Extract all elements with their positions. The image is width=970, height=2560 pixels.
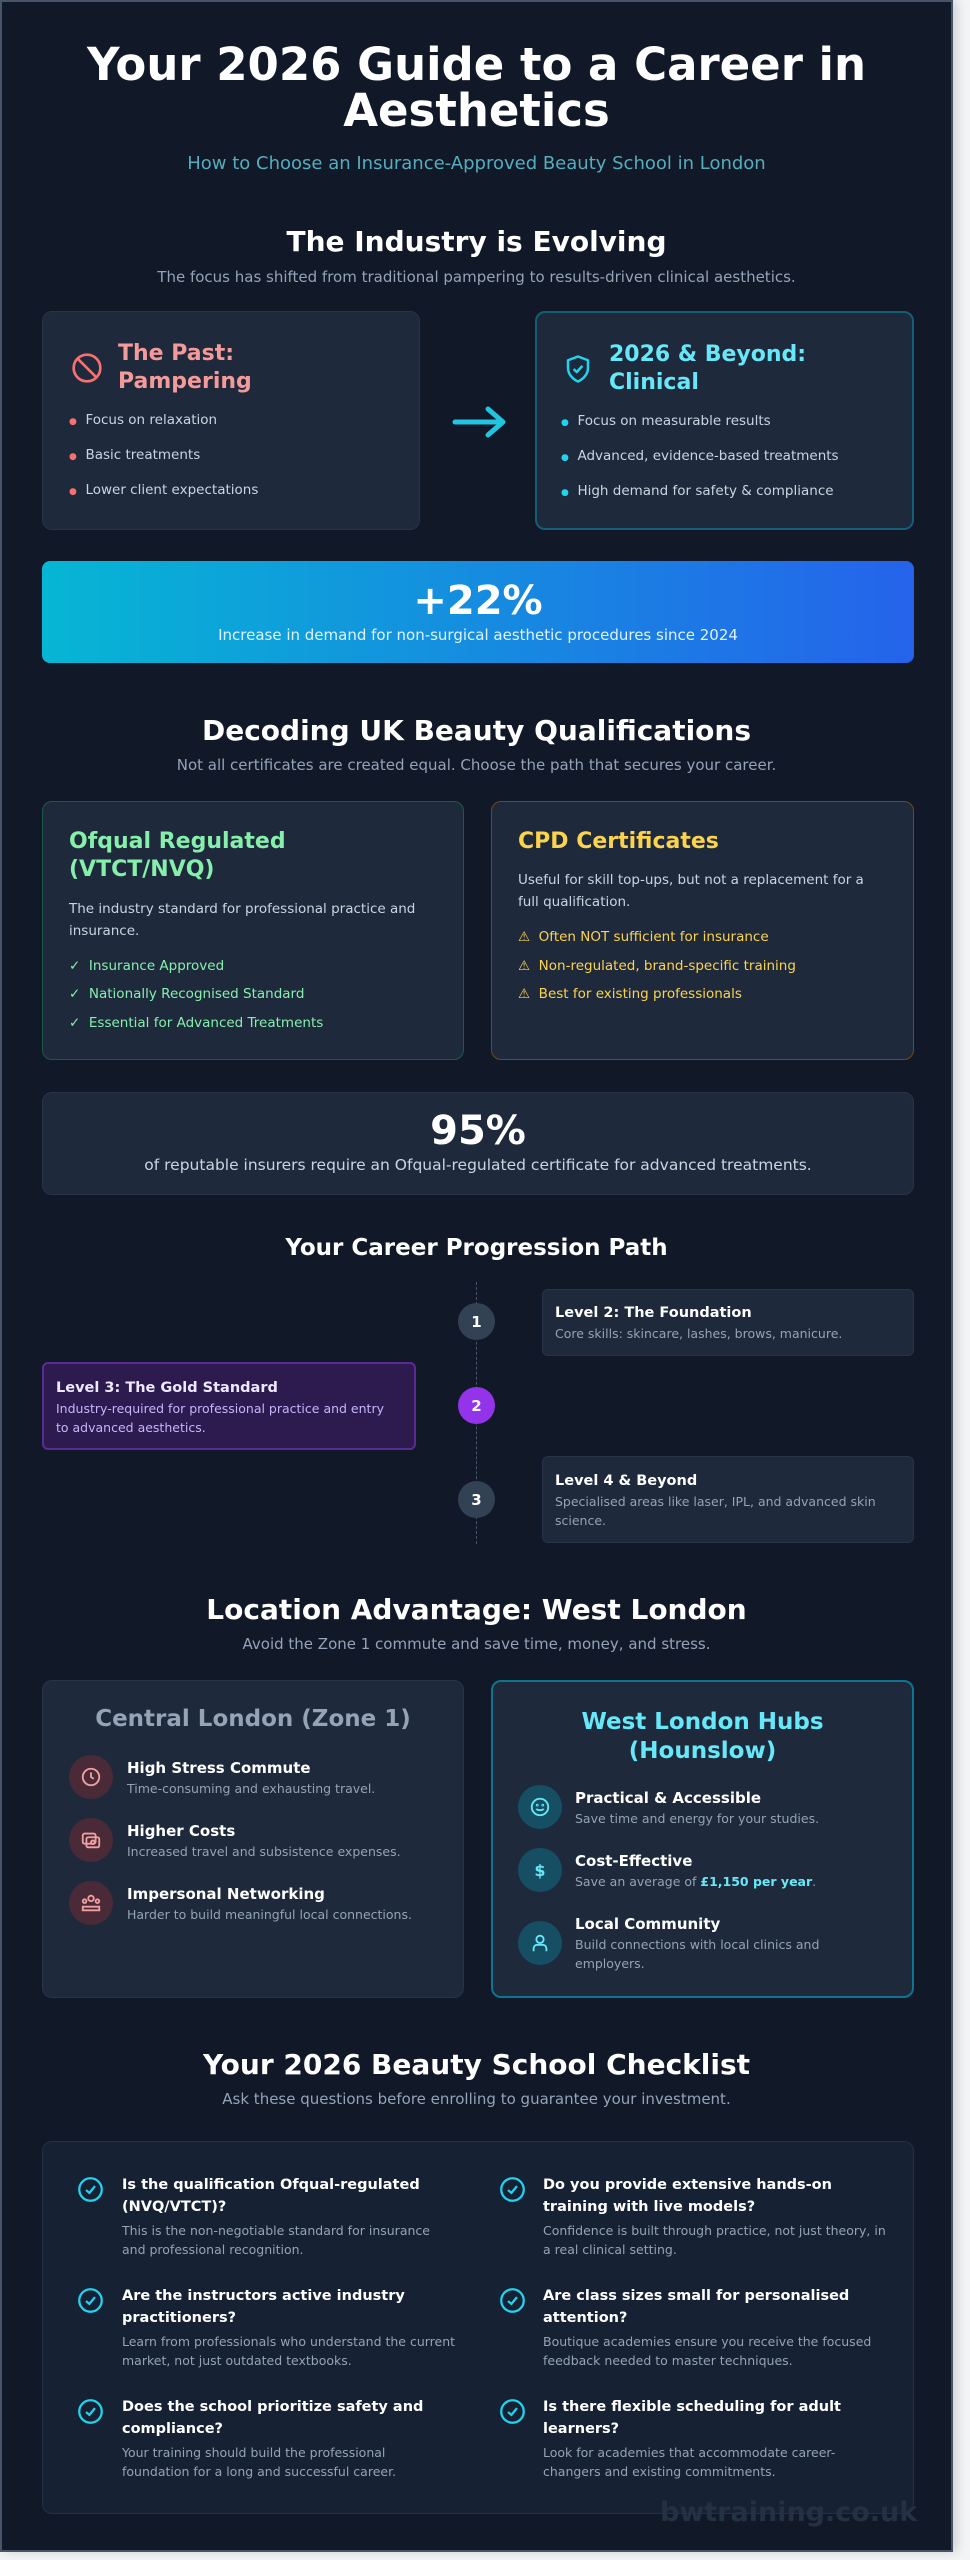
ofqual desc: The industry standard for professional practice and insurance. (69, 901, 415, 939)
ofqual checks: ✓ Insurance Approved (69, 958, 224, 974)
check item 3 (78, 2288, 455, 2368)
panel: west london (491, 1680, 914, 1998)
step 2 box: Level 3: The Gold Standard (56, 1380, 278, 1396)
step 3 box: Specialised areas like laser, IPL, and advanced skin science. (555, 1494, 876, 1528)
ofqual checks: ✓ Essential for Advanced Treatments (69, 1015, 323, 1031)
clinical title: 2026 & Beyond: (609, 342, 806, 367)
timeline line (476, 1282, 477, 1544)
cpd warnings: ⚠ Often NOT sufficient for insurance (518, 929, 769, 945)
subtitle: How to Choose an Insurance-Approved Beauty School in London (187, 153, 766, 174)
heading: industry evolving: The Industry is Evolving (286, 225, 666, 258)
heading: location: Location Advantage: West London (206, 1593, 747, 1626)
item: costs (69, 1818, 401, 1862)
check item 6: Look for academies that accommodate career-changers and existing commitments. (543, 2445, 835, 2479)
item: costs: Increased travel and subsistence expenses. (127, 1844, 401, 1859)
heading: qualifications: Decoding UK Beauty Qualifications (202, 714, 751, 747)
past bullets: ● Lower client expectations (69, 482, 258, 498)
panel: ofqual (42, 801, 464, 1060)
item: community (518, 1915, 819, 1971)
check item 1: This is the non-negotiable standard for insurance and professional recognition. (122, 2223, 430, 2257)
subheading: industry: The focus has shifted from traditional pampering to results-driven clinical aesthetics. (157, 268, 796, 286)
check item 1 (78, 2177, 430, 2257)
central title: Central London (Zone 1) (95, 1706, 411, 1732)
icon: shield (566, 355, 590, 383)
stat: 95%: of reputable insurers require an Ofqual-regulated certificate for advanced treatments. (144, 1156, 812, 1174)
step 3 box (542, 1456, 914, 1543)
item: cost-effective: Save an average of £1,150 per year. (575, 1874, 816, 1889)
step 3 circle: 3 (471, 1490, 482, 1508)
arrow (452, 406, 506, 438)
heading: career path: Your Career Progression Path (285, 1235, 668, 1261)
step 1 circle (458, 1303, 495, 1340)
ofqual checks: ✓ Nationally Recognised Standard (69, 986, 304, 1002)
west title (581, 1709, 824, 1764)
ofqual title: (VTCT/NVQ) (69, 857, 214, 882)
past title: The Past: (118, 341, 234, 366)
step 2 circle (458, 1387, 495, 1424)
stat banner: +22% (42, 561, 914, 663)
stat banner: +22%: Increase in demand for non-surgical aesthetic procedures since 2024 (218, 626, 738, 644)
check item 3: Are the instructors active industry practitioners? (122, 2288, 405, 2326)
west title: (Hounslow) (629, 1738, 776, 1764)
item: community: Build connections with local clinics and employers. (575, 1937, 819, 1971)
icon: smile (518, 1785, 562, 1829)
past bullets: ● Focus on relaxation (69, 412, 217, 428)
title: Your 2026 Guide to a Career in (87, 38, 866, 91)
icon: clock (69, 1755, 113, 1799)
panel: the past (42, 311, 420, 530)
subheading: location: Avoid the Zone 1 commute and save time, money, and stress. (243, 1635, 710, 1653)
panel: central london (42, 1680, 464, 1998)
stat banner: +22%: +22% (413, 578, 543, 624)
step 2 circle: 2 (471, 1396, 482, 1414)
item: community: Local Community (575, 1915, 720, 1933)
step 2 box (42, 1362, 416, 1450)
ofqual checks (69, 958, 323, 1031)
check item 3: Learn from professionals who understand the current market, not just outdated textbooks. (122, 2334, 455, 2368)
check item 5: Your training should build the professional foundation for a long and successful career. (122, 2445, 396, 2479)
watermark: bwtraining.co.uk (660, 2497, 917, 2528)
check item 2: Confidence is built through practice, not just theory, in a real clinical setting. (543, 2223, 886, 2257)
cpd warnings: ⚠ Non-regulated, brand-specific training (518, 958, 796, 974)
item: networking: Impersonal Networking (127, 1885, 325, 1903)
icon: dollar: $ (534, 1860, 546, 1880)
clinical bullets (561, 413, 839, 499)
item: costs: Higher Costs (127, 1822, 235, 1840)
clinical bullets: ● High demand for safety & compliance (561, 483, 834, 499)
ofqual title (69, 829, 286, 882)
step 1 box (542, 1289, 914, 1356)
step 1 box: Core skills: skincare, lashes, brows, manicure. (555, 1326, 842, 1341)
item: networking (69, 1881, 412, 1925)
item: cost-effective: Cost-Effective (575, 1852, 692, 1870)
icon: prohibited (72, 353, 102, 383)
heading: checklist: Your 2026 Beauty School Checklist (203, 2048, 750, 2081)
panel: 2026 clinical (535, 311, 914, 530)
cpd title: CPD Certificates (518, 829, 719, 854)
check item 1: Is the qualification Ofqual-regulated (NVQ/VTCT)? (122, 2177, 420, 2215)
step 1 box: Level 2: The Foundation (555, 1305, 752, 1321)
clinical bullets: ● Focus on measurable results (561, 413, 771, 429)
title (86, 38, 866, 137)
panel: cpd (491, 801, 914, 1060)
step 1 circle: 1 (471, 1312, 482, 1330)
cpd desc: Useful for skill top-ups, but not a replacement for a full qualification. (518, 872, 864, 910)
check item 4: Boutique academies ensure you receive the focused feedback needed to master techniques. (543, 2334, 871, 2368)
cpd warnings (518, 929, 796, 1002)
check item 4 (500, 2288, 871, 2368)
check item 4: Are class sizes small for personalised attention? (543, 2288, 849, 2326)
past title: Pampering (118, 369, 252, 394)
item: cost-effective (518, 1848, 816, 1892)
check item 5 (78, 2399, 423, 2479)
item: networking: Harder to build meaningful local connections. (127, 1907, 412, 1922)
item: commute: Time-consuming and exhausting travel. (127, 1781, 375, 1796)
item: commute (69, 1755, 375, 1799)
subheading: qualifications: Not all certificates are created equal. Choose the path that secures your career. (177, 756, 776, 774)
step 3 box: Level 4 & Beyond (555, 1473, 697, 1489)
item: accessible: Practical & Accessible (575, 1789, 761, 1807)
icon: person (518, 1921, 562, 1965)
check item 2: Do you provide extensive hands-on training with live models? (543, 2177, 832, 2215)
west title: West London Hubs (581, 1709, 824, 1735)
stat: 95%: 95% (430, 1108, 526, 1154)
cpd warnings: ⚠ Best for existing professionals (518, 986, 742, 1002)
check item 2 (500, 2177, 886, 2257)
clinical title (609, 342, 806, 395)
item: accessible: Save time and energy for your studies. (575, 1811, 819, 1826)
clinical bullets: ● Advanced, evidence-based treatments (561, 448, 839, 464)
item: commute: High Stress Commute (127, 1759, 311, 1777)
check item 5: Does the school prioritize safety and compliance? (122, 2399, 423, 2437)
icon: dollar (518, 1848, 562, 1892)
step 3 circle (458, 1481, 495, 1518)
clinical title: Clinical (609, 370, 699, 395)
subheading: checklist: Ask these questions before enrolling to guarantee your investment. (222, 2090, 731, 2108)
step 2 box: Industry-required for professional practice and entry to advanced aesthetics. (56, 1401, 384, 1435)
icon: money (69, 1818, 113, 1862)
past title (118, 341, 252, 394)
ofqual title: Ofqual Regulated (69, 829, 286, 854)
past bullets (69, 412, 258, 498)
past bullets: ● Basic treatments (69, 447, 200, 463)
panel: checklist (42, 2141, 914, 2514)
check item 6: Is there flexible scheduling for adult learners? (543, 2399, 841, 2437)
stat: 95% (42, 1092, 914, 1195)
title: Aesthetics (343, 84, 610, 137)
item: accessible (518, 1785, 819, 1829)
icon: people (69, 1881, 113, 1925)
check item 6 (500, 2399, 841, 2479)
